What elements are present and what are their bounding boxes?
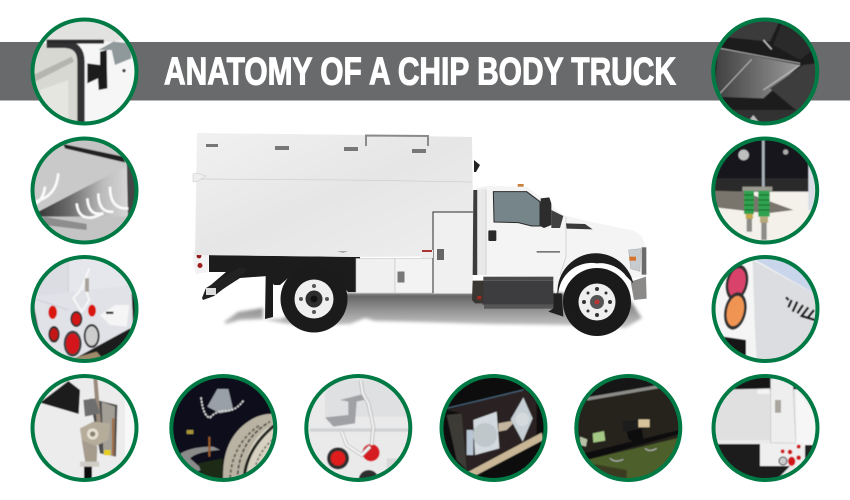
- chip box body: [193, 133, 473, 257]
- truck photo illustration: [193, 133, 647, 336]
- title banner: [0, 42, 850, 100]
- photo circle: chain hook and red reflector: [303, 373, 413, 490]
- photo circle: rear door hinge and seal: [30, 17, 140, 127]
- photo circle: door latch: [30, 373, 140, 483]
- photo circle: rear side body corner: [710, 373, 820, 483]
- photo circle: rear tail lights and chain: [30, 253, 140, 367]
- rear bumper arm: [202, 267, 248, 300]
- top handle: [366, 136, 428, 146]
- top latch and roof marker bits: [474, 160, 480, 172]
- photo circle: dark underbody bracket: [710, 17, 820, 127]
- door seams and handle: [486, 190, 566, 275]
- headlight: [629, 249, 641, 271]
- side compartment door: [421, 212, 473, 294]
- vents: [206, 144, 426, 153]
- photo circle: interior cable hooks: [30, 137, 140, 247]
- wheel arch: [557, 253, 633, 300]
- orange cab marker: [518, 184, 524, 187]
- photo circle: green spring tie-downs: [710, 135, 820, 245]
- front bumper: [631, 277, 647, 300]
- hood badge: [566, 223, 593, 229]
- photo circle: upper side marker lights: [710, 253, 820, 367]
- side mirror: [540, 197, 551, 228]
- rear light panel: [193, 252, 209, 274]
- cab window: [493, 192, 540, 226]
- cab: [472, 184, 647, 317]
- mud flap: [265, 257, 273, 319]
- fuel tank and step: [483, 277, 553, 281]
- title: ANATOMY OF A CHIP BODY TRUCK: [164, 50, 676, 94]
- photo circle: spare tire and chain: [170, 373, 280, 483]
- photo circle: rear pintle hitch: [573, 373, 683, 483]
- photo circle: electrical connector plates: [438, 373, 548, 483]
- front wheel: [563, 268, 631, 336]
- ground shadow: [224, 293, 642, 328]
- chassis underside: [205, 255, 360, 298]
- rear wheel: [280, 266, 348, 332]
- side toolbox: [356, 258, 473, 293]
